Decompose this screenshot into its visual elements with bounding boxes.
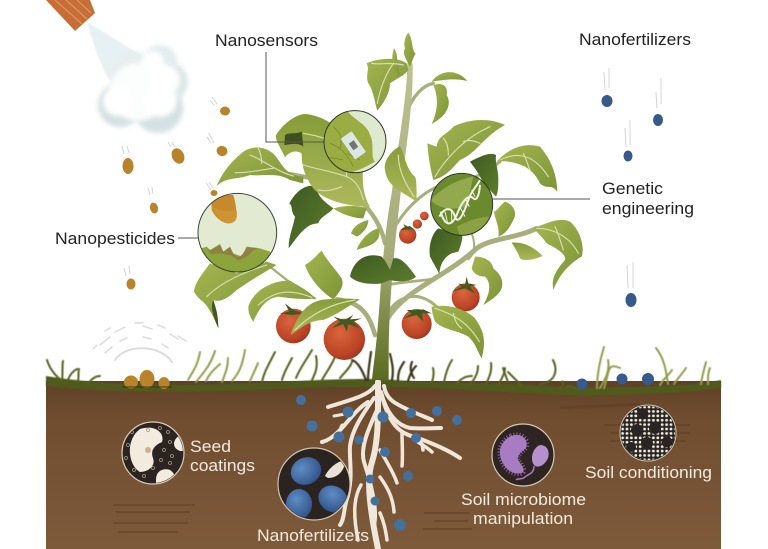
center leaf <box>385 146 417 202</box>
dark center leaf <box>350 255 416 284</box>
upper leaves <box>367 33 467 124</box>
impact ripples <box>93 323 186 362</box>
spray <box>87 22 145 85</box>
tomatoes <box>276 212 480 360</box>
leader line: nanopesticides <box>178 237 198 239</box>
leader line: genetic engineering <box>492 198 590 200</box>
label: Nanopesticides: Nanopesticides <box>55 230 175 248</box>
lower leaves <box>194 251 484 358</box>
spray cloud <box>98 45 188 133</box>
label: Seed coatings: Seed <box>190 438 231 456</box>
magnifier: nanosensor <box>323 110 386 174</box>
label: Seed coatings <box>190 438 255 475</box>
soil nanofertilizer particles <box>296 395 462 531</box>
nozzle <box>46 0 95 31</box>
label: Genetic engineering: engineering <box>602 200 694 218</box>
small inner leaves <box>333 206 379 250</box>
label: Soil conditioning: Soil conditioning <box>585 464 712 482</box>
nanopesticide droplets <box>122 97 230 290</box>
large left leaf <box>217 114 370 248</box>
label: Nanofertilizers (soil): Nanofertilizers <box>257 527 369 545</box>
leader line: nanosensors <box>266 52 324 142</box>
soil circle: soil conditioning <box>620 405 676 461</box>
soil circle: microbiome <box>492 424 554 486</box>
tomato plant <box>194 33 583 380</box>
label: Soil microbiome manipulation: manipulation <box>473 510 573 528</box>
label: Nanofertilizers (top): Nanofertilizers <box>579 31 691 49</box>
label: Genetic engineering: Genetic <box>602 180 663 198</box>
magnifier: genetic engineering <box>431 173 493 237</box>
roots <box>322 382 460 549</box>
lower right leaf <box>472 257 502 305</box>
label: Nanosensors: Nanosensors <box>215 32 318 50</box>
label: Seed coatings: coatings <box>190 457 255 475</box>
right leaves <box>427 120 583 290</box>
ground surface and grass <box>46 347 721 396</box>
soil circle: nanofertilizers <box>278 448 352 520</box>
stem and branches <box>270 63 537 380</box>
blue nanofertilizer droplets <box>576 68 663 390</box>
soil circle: seed coatings <box>122 422 188 486</box>
label: Genetic engineering <box>602 180 694 218</box>
label: Soil microbiome manipulation: Soil microbiome <box>461 491 586 509</box>
soil panel <box>46 381 721 549</box>
soil texture lines <box>113 404 690 532</box>
label: Soil microbiome manipulation <box>461 491 586 528</box>
magnifier: nanopesticide <box>197 193 277 277</box>
seeds on ground <box>122 370 172 389</box>
